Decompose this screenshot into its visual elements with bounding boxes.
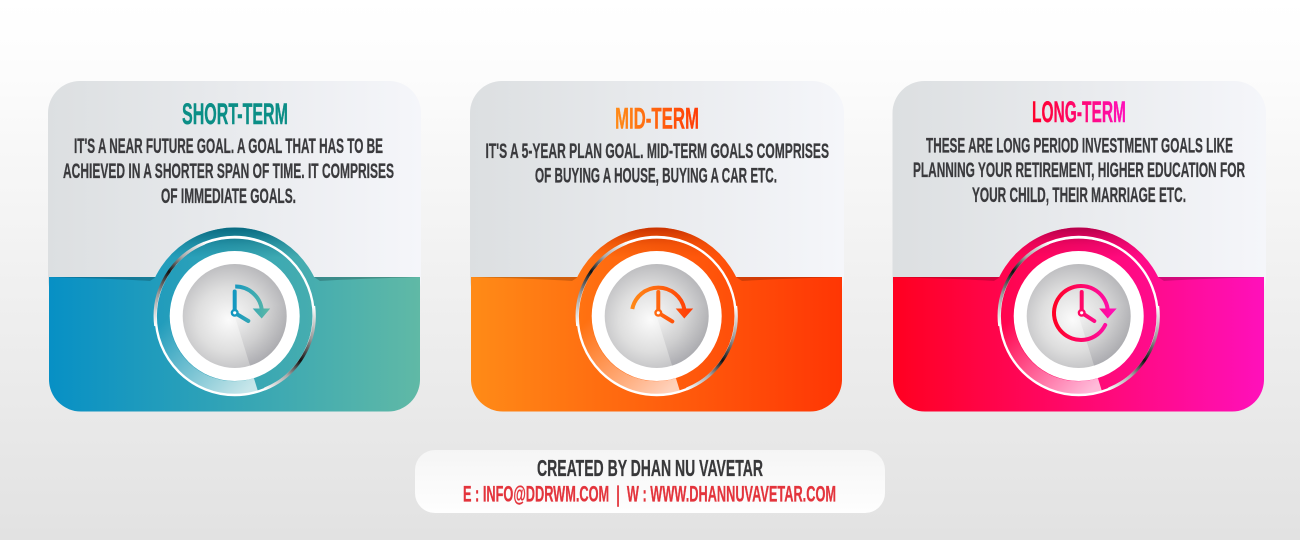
panel background bbox=[892, 81, 1266, 311]
colour band bbox=[49, 277, 420, 412]
credit line: CREATED BY DHAN NU VAVETAR bbox=[537, 455, 763, 481]
description: short-term: OF IMMEDIATE GOALS. bbox=[161, 184, 296, 208]
description: mid-term bbox=[486, 139, 829, 188]
band fold shadow bbox=[471, 277, 842, 281]
heading: short-term: SHORT-TERM bbox=[182, 98, 288, 131]
panel: mid-term bbox=[470, 81, 844, 412]
dial: clock icon bbox=[155, 237, 314, 395]
icon: short-term clock bbox=[232, 286, 270, 321]
dial: clock icon bbox=[999, 237, 1158, 395]
description: mid-term: IT'S A 5-YEAR PLAN GOAL. MID-TERM GOALS COMPRISES bbox=[486, 139, 829, 163]
panel: short-term bbox=[48, 81, 421, 412]
footer credit box bbox=[415, 450, 885, 513]
heading: long-term: LONG-TERM bbox=[1032, 96, 1126, 129]
dial cap bbox=[990, 228, 1167, 404]
band fold shadow bbox=[893, 277, 1264, 281]
colour band bbox=[893, 277, 1264, 412]
description: short-term: IT'S A NEAR FUTURE GOAL. A GOAL THAT HAS TO BE bbox=[74, 134, 383, 158]
colour band bbox=[471, 277, 842, 412]
icon: mid-term clock bbox=[632, 288, 693, 321]
panel background bbox=[470, 81, 844, 311]
icon: long-term clock bbox=[1054, 286, 1117, 340]
dial cap bbox=[146, 228, 323, 404]
description: long-term bbox=[913, 134, 1245, 207]
heading: mid-term: MID-TERM bbox=[615, 102, 699, 136]
description: short-term: ACHIEVED IN A SHORTER SPAN OF TIME. IT COMPRISES bbox=[63, 159, 394, 183]
dial cap bbox=[568, 228, 745, 404]
description: mid-term: OF BUYING A HOUSE, BUYING A CAR ETC. bbox=[535, 164, 777, 188]
dial: clock icon bbox=[577, 237, 736, 395]
description: short-term bbox=[63, 134, 394, 208]
panel background bbox=[48, 81, 421, 311]
contact line: E : INFO@DDRWM.COM | W : WWW.DHANNUVAVETAR.COM bbox=[463, 482, 836, 506]
band fold shadow bbox=[49, 277, 420, 281]
panel: long-term bbox=[892, 81, 1266, 412]
